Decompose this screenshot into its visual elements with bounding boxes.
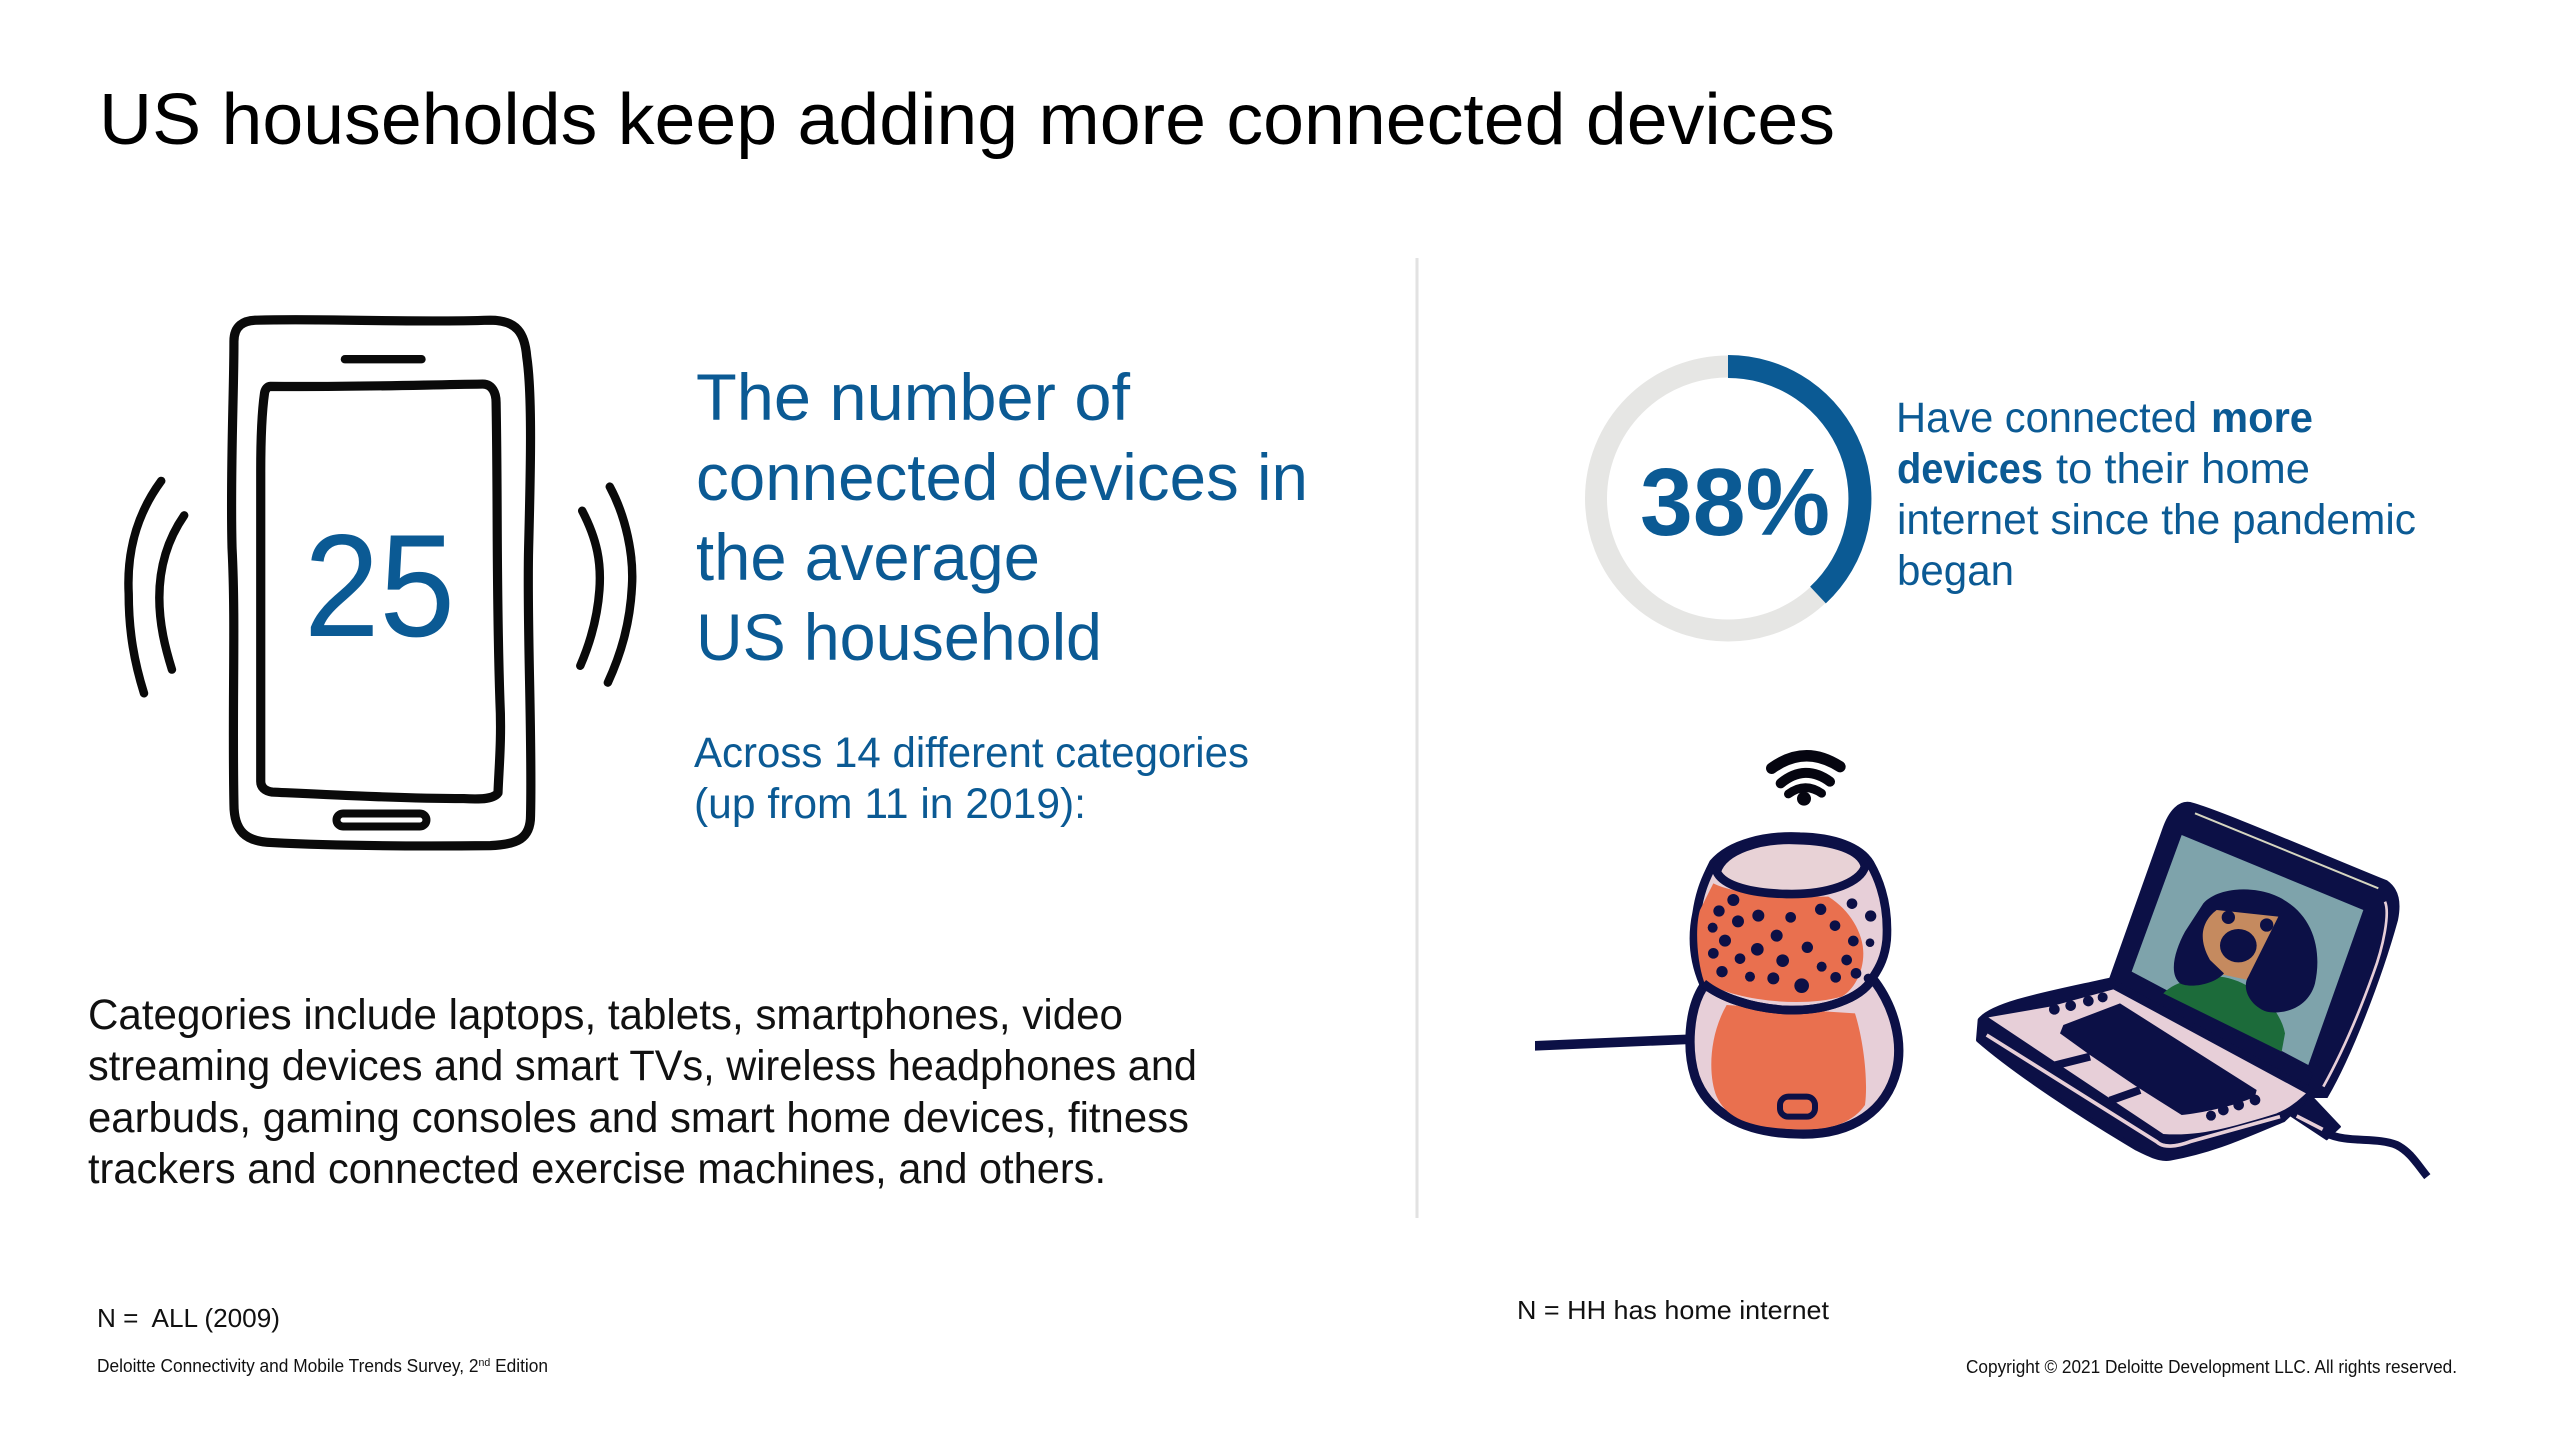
text block: category list: earbuds, gaming consoles and smart home devices, fitness (88, 1094, 1189, 1142)
text block: connected more devices (1896, 394, 2416, 595)
icon: laptop with video call (1978, 803, 2427, 1177)
text block: connected more devices: more (2211, 394, 2313, 442)
subheading: categories: (up from 11 in 2019): (694, 780, 1086, 828)
heading: number of connected devices: the average (696, 520, 1040, 594)
copyright: Copyright © 2021 Deloitte Development LLC. All rights reserved. (1966, 1357, 2457, 1377)
footnote: sample size home internet: N = HH has home internet (1517, 1295, 1830, 1325)
text block: connected more devices: to their home (2056, 445, 2310, 493)
heading: number of connected devices: connected devices in (696, 440, 1308, 514)
donut chart: 38 percent: 38% (1640, 449, 1830, 556)
icon: vibrating smartphone with device count (128, 320, 632, 846)
heading: number of connected devices: US household (696, 600, 1102, 674)
heading: number of connected devices (696, 360, 1308, 674)
title: US households keep adding more connected devices (99, 80, 1835, 160)
icon: smart speaker with wifi signal (1535, 756, 1899, 1134)
source line: Deloitte Connectivity and Mobile Trends Survey, 2 (97, 1356, 494, 1376)
text block: connected more devices: internet since the pandemic (1897, 496, 2416, 544)
text block: connected more devices: Have connected (1896, 394, 2197, 442)
subheading: categories: Across 14 different categories (694, 729, 1249, 777)
donut chart: 38 percent (1596, 366, 1860, 630)
icon: vibrating smartphone with device count: 25 (304, 504, 455, 667)
source line: Edition (490, 1356, 548, 1376)
text block: category list: Categories include laptops, tablets, smartphones, video (88, 991, 1123, 1039)
text block: connected more devices: devices (1897, 445, 2043, 493)
text block: connected more devices: began (1897, 547, 2014, 595)
text block: category list: trackers and connected exercise machines, and others. (88, 1145, 1106, 1193)
heading: number of connected devices: The number of (696, 360, 1131, 434)
text block: category list: streaming devices and smart TVs, wireless headphones and (88, 1042, 1197, 1090)
source line: nd (479, 1357, 490, 1369)
footnote: sample size all: N = ALL (2009) (97, 1303, 280, 1333)
subheading: categories (694, 729, 1249, 828)
text block: category list (88, 991, 1197, 1193)
